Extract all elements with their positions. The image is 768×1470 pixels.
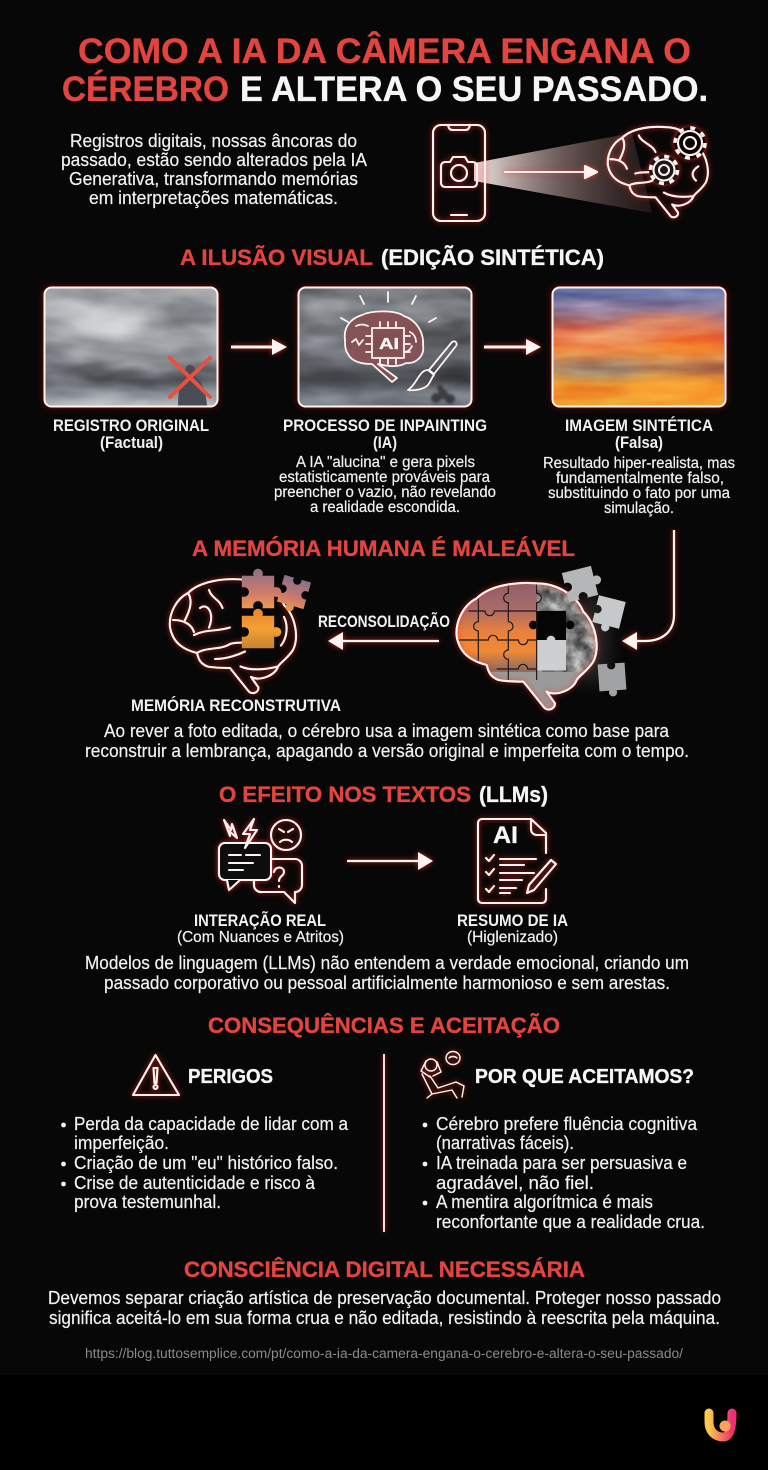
description: a realidade escondida.: [310, 499, 460, 516]
list: IA treinada para ser persuasiva e: [436, 1153, 687, 1173]
puzzle piece: tilted: [275, 575, 311, 615]
label: memória reconstrutiva: MEMÓRIA RECONSTRUTIVA: [131, 696, 341, 715]
heading: consciência digital: CONSCIÊNCIA DIGITAL NECESSÁRIA: [184, 1257, 585, 1282]
intro text: [61, 131, 367, 208]
label: [53, 417, 209, 452]
floating grey piece: top: [562, 564, 605, 602]
label: [565, 416, 713, 452]
panel: processo de inpainting: [274, 287, 496, 516]
heading: efeito nos textos: (LLMs): [479, 782, 548, 807]
floating grey piece: lower: [598, 663, 627, 697]
label: reconsolidação with arrow: RECONSOLIDAÇÃO: [318, 611, 450, 631]
description: A IA "alucina" e gera pixels: [296, 454, 475, 471]
description: substituindo o fato por uma: [548, 485, 730, 502]
description: fundamentalmente falso,: [556, 470, 724, 487]
label: (Higlenizado): [467, 929, 558, 946]
heading: consequências: CONSEQUÊNCIAS E ACEITAÇÃO: [208, 1013, 560, 1038]
title: COMO A IA DA CÂMERA ENGANA O: [78, 31, 691, 71]
label: REGISTRO ORIGINAL: [53, 417, 209, 435]
list: [423, 1114, 705, 1232]
text: memória description: Ao rever a foto editada, o cérebro usa a imagem sintética como base para: [104, 721, 670, 741]
source url: https://blog.tuttosemplice.com/pt/como-a-ia-da-camera-engana-o-cerebro-e-altera-o-seu-passado/: [85, 1346, 683, 1361]
description: [543, 455, 735, 517]
panel: por que aceitamos: [421, 1052, 705, 1232]
label: [283, 417, 487, 452]
heading: memória: A MEMÓRIA HUMANA É MALEÁVEL: [192, 536, 575, 561]
label: [177, 910, 344, 946]
label: reconsolidação with arrow: [318, 611, 450, 650]
image: sky with AI brain and paintbrush: AI: [379, 336, 399, 353]
list: [61, 1114, 349, 1212]
heading: a ilusão visual: A ILUSÃO VISUAL: [180, 245, 373, 270]
text: LLM description: passado corporativo ou pessoal artificialmente harmonioso e sem arestas.: [104, 973, 670, 993]
intro text: em interpretações matemáticas.: [89, 188, 338, 208]
divider: [383, 1054, 385, 1232]
label: RESUMO DE IA: [457, 912, 568, 930]
label: (Com Nuances e Atritos): [177, 929, 344, 946]
list: Cérebro prefere fluência cognitiva: [436, 1114, 698, 1134]
icon: reconstructive brain with puzzle pieces: [170, 569, 311, 693]
icon: AI document: [457, 819, 568, 946]
title: CÉREBRO: [62, 69, 229, 109]
label: [457, 912, 568, 946]
icon: phone projecting into brain: [433, 125, 708, 221]
intro text: Registros digitais, nossas âncoras do: [70, 131, 357, 151]
image: cloudy sky with crossed-out person: [44, 287, 218, 407]
label: (IA): [373, 434, 397, 452]
description: estatisticamente prováveis para: [279, 469, 490, 486]
arrow: original to inpainting: [231, 339, 287, 355]
list: Crise de autenticidade e risco à: [74, 1173, 316, 1193]
text: memória description: reconstruir a lembrança, apagando a versão original e imperfeita com o tempo.: [85, 741, 689, 761]
intro text: passado, estão sendo alterados pela IA: [61, 150, 367, 170]
text: conclusion: [48, 1288, 721, 1328]
arrow: inpainting to synthetic: [484, 339, 541, 355]
title: E ALTERA O SEU PASSADO.: [240, 70, 708, 109]
heading: a ilusão visual: (EDIÇÃO SINTÉTICA): [381, 245, 604, 270]
text: LLM description: Modelos de linguagem (LLMs) não entendem a verdade emocional, criando um: [85, 953, 689, 973]
arrow: real to summary: [347, 852, 433, 870]
list: Criação de um "eu" histórico falso.: [74, 1153, 338, 1173]
label: PROCESSO DE INPAINTING: [283, 417, 487, 435]
puzzle piece: top: [242, 569, 281, 608]
list: A mentira algorítmica é mais: [436, 1192, 653, 1212]
list: agradável, não fiel.: [436, 1173, 594, 1193]
list: imperfeição.: [74, 1133, 169, 1153]
icon: AI document: AI: [493, 822, 518, 849]
icon: person relaxing in chair: [421, 1052, 464, 1098]
panel: perigos: [61, 1055, 349, 1212]
description: simulação.: [604, 500, 674, 517]
list: prova testemunhal.: [74, 1192, 221, 1212]
heading: a ilusão visual: [180, 245, 604, 270]
list: (narrativas fáceis).: [436, 1133, 574, 1153]
list: Perda da capacidade de lidar com a: [74, 1114, 349, 1134]
logo: [709, 1413, 732, 1437]
label: INTERAÇÃO REAL: [194, 910, 326, 930]
text: memória description: [85, 721, 689, 761]
label: IMAGEM SINTÉTICA: [565, 416, 713, 435]
intro text: Generativa, transformando memórias: [69, 169, 358, 189]
label: (Factual): [100, 434, 163, 452]
description: Resultado hiper-realista, mas: [543, 455, 735, 472]
label: (Falsa): [615, 434, 663, 452]
icon: chat bubbles with conflict: [177, 819, 344, 946]
icon: warning triangle: [133, 1055, 179, 1095]
image: sky with AI brain and paintbrush: [298, 287, 472, 407]
heading: PERIGOS: [188, 1066, 273, 1088]
heading: POR QUE ACEITAMOS?: [475, 1066, 694, 1088]
title: [62, 31, 708, 109]
panel: imagem sintética: [543, 287, 740, 517]
description: [274, 454, 496, 516]
text: conclusion: significa aceitá-lo em sua forma crua e não editada, resistindo à reescrita pela máquina.: [49, 1308, 720, 1328]
panel: registro original: [44, 287, 218, 452]
image: sunset: [550, 287, 740, 407]
list: reconfortante que a realidade crua.: [436, 1212, 705, 1232]
description: preencher o vazio, não revelando: [274, 484, 496, 501]
arrow: synthetic image down to brain: [622, 530, 674, 650]
text: conclusion: Devemos separar criação artística de preservação documental. Proteger nosso passado: [48, 1288, 721, 1308]
icon: brain made of puzzle pieces: [450, 564, 627, 718]
puzzle piece: lower: [242, 609, 281, 648]
heading: efeito nos textos: O EFEITO NOS TEXTOS: [219, 782, 471, 807]
floating grey piece: middle: [591, 595, 626, 635]
text: LLM description: [85, 953, 689, 993]
